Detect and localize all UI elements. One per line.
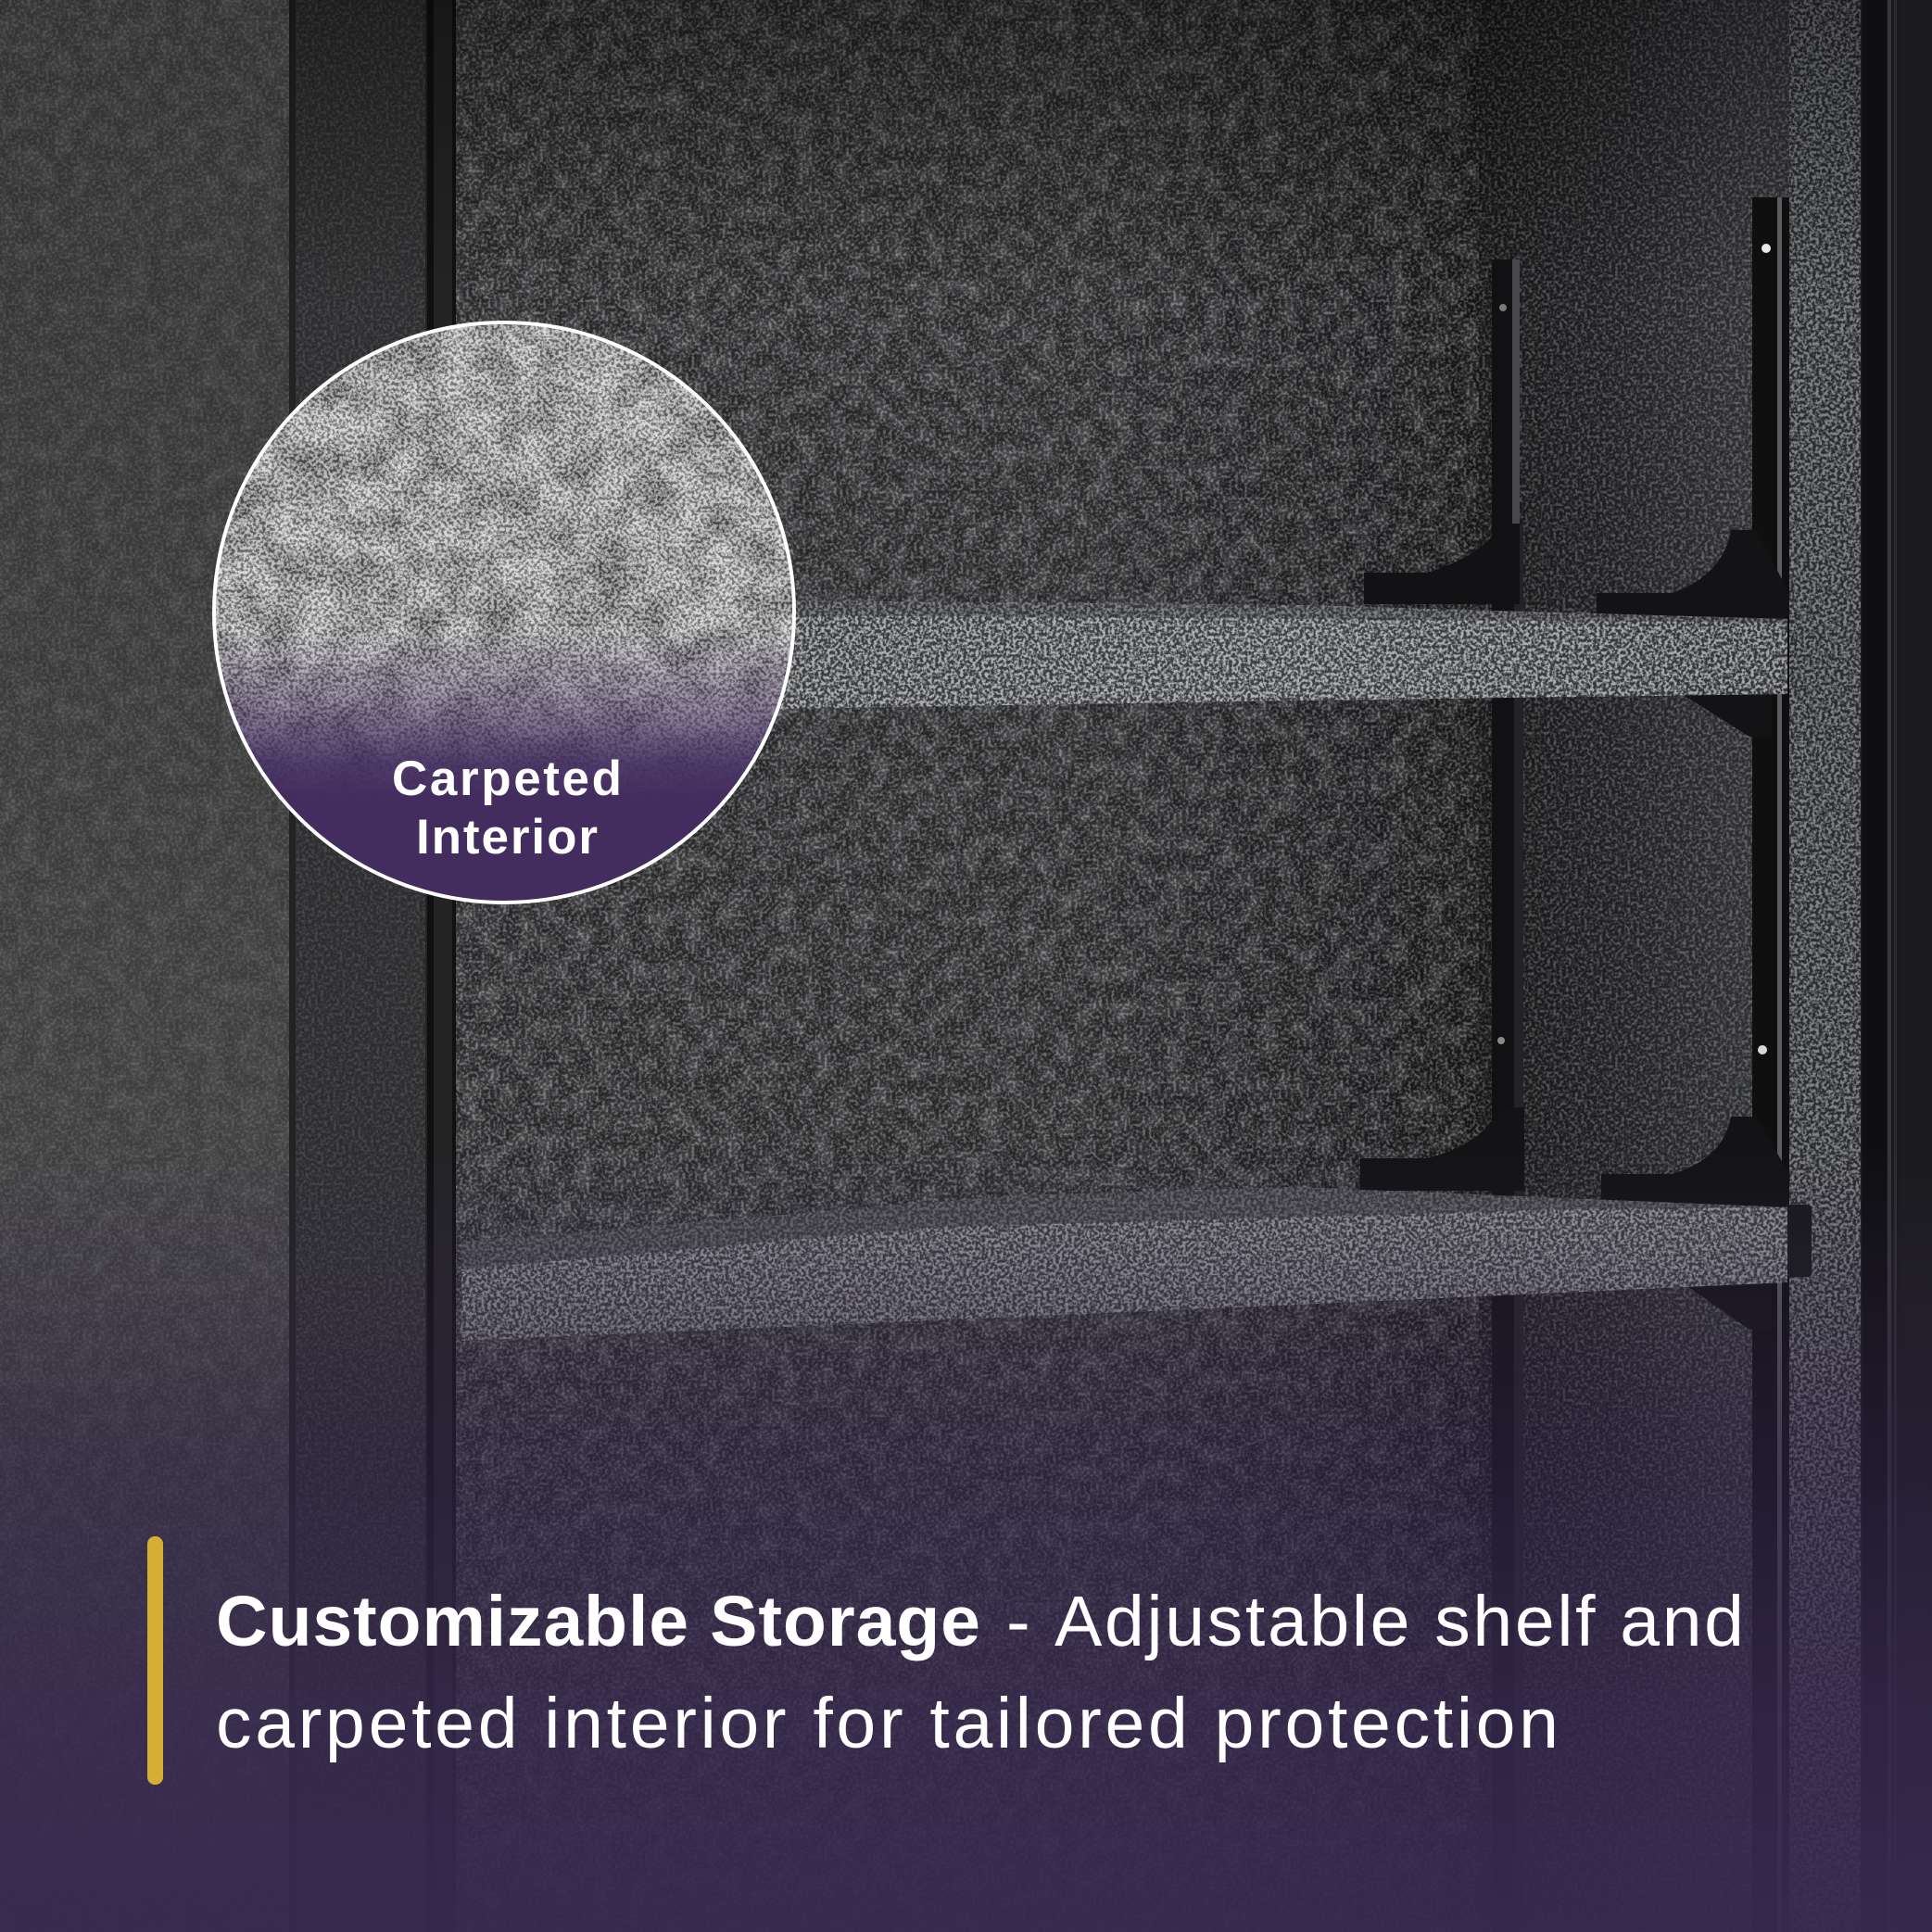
callout label: Interior (416, 810, 598, 865)
left shelf rail (1492, 259, 1523, 1932)
headline text: Adjustable shelf and (1054, 1582, 1744, 1661)
headline text: - (1006, 1582, 1030, 1661)
panel: safe door side (0, 0, 289, 1932)
panel: door frame (289, 0, 456, 1932)
callout label (392, 751, 622, 865)
panel: carpeted back wall (456, 0, 1484, 1932)
top shading (289, 0, 1861, 306)
callout label: Carpeted (392, 751, 622, 806)
headline text (216, 1582, 1744, 1763)
upper shelf brackets (1364, 524, 1789, 737)
headline text: carpeted interior for tailored protection (216, 1684, 1559, 1763)
upper shelf (779, 600, 1787, 709)
headline text: Customizable Storage (216, 1582, 980, 1661)
circle outline (214, 322, 794, 903)
accent bar (147, 1536, 163, 1785)
carpet texture (213, 322, 795, 904)
callout: carpeted interior magnifier (213, 322, 795, 904)
lower shelf (459, 1181, 1793, 1348)
right shelf rail (1752, 197, 1789, 1932)
panel: carpeted side wall (1479, 0, 1861, 1932)
purple gradient overlay (0, 1149, 1932, 1932)
panel: right door edge (1861, 0, 1932, 1932)
lower shelf brackets (1360, 1107, 1812, 1330)
